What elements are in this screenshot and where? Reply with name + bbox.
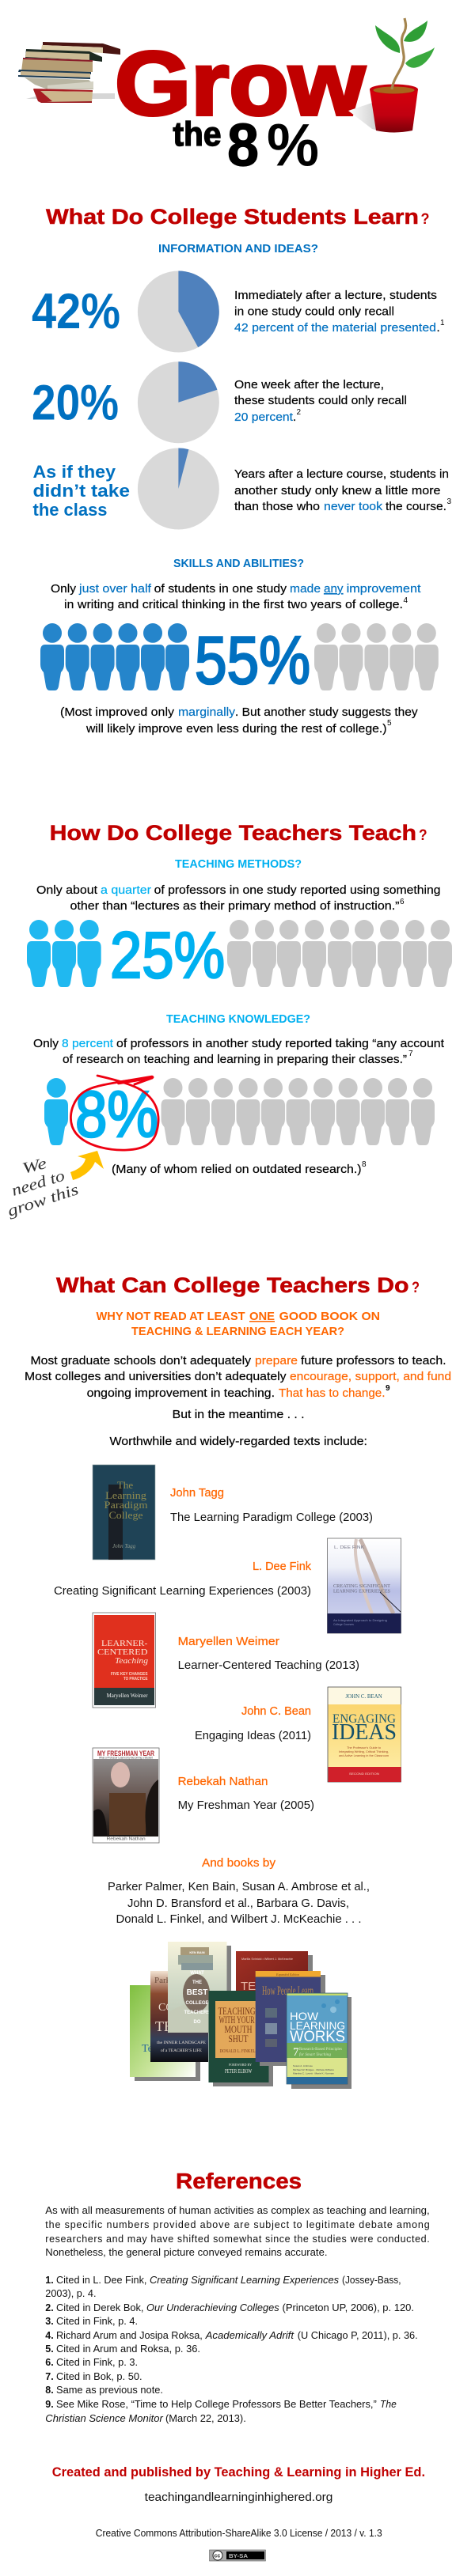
book: How Learning Works: 7 xyxy=(293,2046,299,2059)
text: most graduate schools: prepare xyxy=(255,1354,298,1367)
text: one week after the lecture: 2 xyxy=(296,408,301,417)
book: Palmer: the INNER LANDSCAPE xyxy=(157,2041,206,2045)
book cover: Learner-Centered Teaching: CENTERED xyxy=(97,1647,148,1657)
list: numbered references: 7. xyxy=(45,2371,54,2382)
text: just over half: of students in one study xyxy=(154,582,287,596)
text: references introduction: the specific numbers provided above are subject to legitimate debate among xyxy=(45,2219,430,2230)
arrow: orange pointing to 8% xyxy=(70,1151,104,1180)
book entry: Rebekah Nathan: My Freshman Year (2005) xyxy=(178,1799,314,1812)
book: How Learning Works: Susan A. Ambrose xyxy=(293,2064,313,2067)
book: What the Best College Teachers Do: COLLEGE xyxy=(185,2001,209,2006)
heading: How Do College Teachers Teach: ? xyxy=(419,827,428,844)
text: and books by xyxy=(108,1856,370,1926)
list: numbered references: (U Chicago P, 2011), p. 36. xyxy=(298,2330,418,2341)
book cover: Learner-Centered Teaching xyxy=(93,1613,155,1708)
title: Grow: Grow xyxy=(115,34,365,134)
stat: 55%: 55% xyxy=(195,623,310,698)
book cover: Creating Significant Learning Experiences xyxy=(328,1538,401,1633)
list: numbered references xyxy=(45,2275,418,2424)
book: How Learning Works: Michael W. Bridges · Michele DiPietro xyxy=(293,2068,334,2071)
book: Teaching Tips red xyxy=(236,1951,313,2003)
credit: created and published by: Created and published by Teaching & Learning in Higher Ed. xyxy=(52,2464,425,2480)
book: Palmer: TH xyxy=(155,2018,174,2034)
text: references introduction: researchers and may have shifted somewhat since the studies were conducted. xyxy=(45,2234,430,2245)
book: What the Best College Teachers Do: WHAT xyxy=(190,1971,204,1976)
book cover: Engaging Ideas xyxy=(328,1687,401,1782)
book: What the Best College Teachers Do: TEACHERS xyxy=(184,2010,211,2015)
text: most graduate schools: Most colleges and universities don’t adequately xyxy=(25,1370,287,1383)
book: Teaching Tips red: Marilla Svinicki • Wilbert J. McKeachie xyxy=(241,1957,294,1961)
list: numbered references: Richard Arum and Josipa Roksa, xyxy=(56,2330,203,2341)
book entry: L. Dee Fink xyxy=(54,1560,311,1598)
text: 8 percent of professors: of research on teaching and learning in preparing their classes.” xyxy=(63,1053,407,1066)
book entry: Maryellen Weimer: Learner-Centered Teaching (2013) xyxy=(178,1659,359,1672)
text: but in the meantime: But in the meantime . . . xyxy=(173,1408,305,1421)
book cover: Learner-Centered Teaching: LEARNER- xyxy=(101,1639,148,1648)
book: Palmer: of a TEACHER’S LIFE xyxy=(161,2049,202,2053)
list: numbered references: 1. xyxy=(45,2275,54,2286)
title: the 8%: 8 xyxy=(227,112,259,179)
book entry: Rebekah Nathan xyxy=(178,1775,314,1812)
heading: References: References xyxy=(176,2169,302,2193)
pie chart: a few percent xyxy=(138,448,219,530)
book cover: Engaging Ideas: Integrating Writing, Critical Thinking, xyxy=(339,1750,389,1753)
book: Teaching with Your Mouth Shut xyxy=(209,1991,273,2086)
text: one week after the lecture xyxy=(234,378,407,424)
book entry: L. Dee Fink: L. Dee Fink xyxy=(253,1560,311,1573)
annotation: we need to grow this: need to xyxy=(10,1167,66,1200)
book cover: Learner-Centered Teaching: Maryellen Weimer xyxy=(107,1693,148,1699)
text: most graduate schools: Most graduate schools don’t adequately xyxy=(30,1354,252,1367)
list: numbered references: Creating Significant Learning Experiences xyxy=(150,2275,339,2286)
book cover: My Freshman Year xyxy=(93,1748,159,1843)
icon: stack of books xyxy=(18,42,120,103)
icon: blue person 8 percent xyxy=(44,1078,68,1145)
book entry: John C. Bean: John C. Bean xyxy=(241,1704,311,1718)
heading: What Can College Teachers Do: ? xyxy=(412,1280,420,1296)
text: one week after the lecture: . xyxy=(293,410,296,424)
text: 8 percent of professors: of professors in another study reported taking “any account xyxy=(116,1037,445,1050)
book: What the Best College Teachers Do: KEN BAIN xyxy=(189,1950,205,1954)
list: numbered references: Cited in Arum and Roksa, p. 36. xyxy=(56,2343,200,2355)
book: green cover: Te xyxy=(142,2043,153,2055)
list: numbered references: Our Underachieving Colleges xyxy=(146,2302,279,2313)
book entry: John Tagg xyxy=(170,1486,373,1524)
stat: as if they didn't take the class xyxy=(33,462,130,520)
text: and books by: Parker Palmer, Ken Bain, Susan A. Ambrose et al., xyxy=(108,1880,370,1893)
book: Teaching with Your Mouth Shut: WITH YOUR xyxy=(218,2014,255,2026)
book cover: Learner-Centered Teaching: FIVE KEY CHANGES xyxy=(111,1672,148,1677)
book cover: The Learning Paradigm College: John Tagg xyxy=(112,1543,136,1549)
list: numbered references: Cited in Bok, p. 50. xyxy=(56,2371,142,2382)
icon: creative commons badge: BY-SA xyxy=(229,2554,248,2559)
book entry: John C. Bean: Engaging Ideas (2011) xyxy=(195,1729,311,1742)
text: just over half: made xyxy=(290,582,321,596)
book: green cover xyxy=(130,1985,200,2081)
book: Teaching with Your Mouth Shut: MOUTH xyxy=(225,2023,252,2035)
text: years after a lecture course: another study only knew a little more xyxy=(234,484,440,497)
book: What the Best College Teachers Do: BEST xyxy=(187,1988,207,1997)
list: numbered references: Academically Adrift xyxy=(205,2330,294,2341)
list: numbered references: (March 22, 2013). xyxy=(165,2413,246,2424)
book: How People Learn xyxy=(256,1971,325,2066)
text: a quarter of professors: 6 xyxy=(400,898,405,906)
title: the 8%: the xyxy=(173,115,222,153)
icon row: blue people 25 percent xyxy=(27,920,101,987)
list: numbered references: 2003), p. 4. xyxy=(45,2288,96,2299)
book cover: My Freshman Year: Rebekah Nathan xyxy=(107,1836,146,1841)
text: years after a lecture course: Years after a lecture course, students in xyxy=(234,467,449,481)
text: immediately after a lecture: in one study could only recall xyxy=(234,305,394,318)
text: most graduate schools: That has to change. xyxy=(279,1386,385,1400)
annotation: we need to grow this xyxy=(6,1155,81,1220)
stat: as if they didn't take the class: As if they xyxy=(33,462,116,482)
subheading: teaching knowledge: TEACHING KNOWLEDGE? xyxy=(166,1012,310,1026)
book entry: L. Dee Fink: Creating Significant Learning Experiences (2003) xyxy=(54,1584,311,1598)
book cover: The Learning Paradigm College xyxy=(93,1465,155,1560)
text: years after a lecture course: never took xyxy=(324,500,383,513)
book entry: John Tagg: The Learning Paradigm College (2003) xyxy=(170,1511,373,1524)
book: Palmer: CO xyxy=(158,2002,173,2014)
book: Palmer xyxy=(150,1971,208,2062)
book: What the Best College Teachers Do xyxy=(168,1942,231,2033)
book: Teaching Tips red: TEA xyxy=(241,1980,264,1993)
book cover: Engaging Ideas: The Professor’s Guide to xyxy=(347,1746,381,1749)
subheading: teaching methods: TEACHING METHODS? xyxy=(175,857,302,871)
text: a quarter of professors: other than “lectures as their primary method of instruction.” xyxy=(70,899,399,913)
book cover: Creating Significant Learning Experiences: College Courses xyxy=(333,1623,354,1626)
subheading: why not read at least one good book: ONE xyxy=(249,1310,275,1323)
text: immediately after a lecture: 1 xyxy=(440,319,445,327)
text: most improved only marginally: 5 xyxy=(387,719,392,728)
text: most improved only marginally: will likely improve even less during the rest of college.) xyxy=(86,722,386,736)
icon row: grey people 75 percent xyxy=(227,920,452,987)
text: 8 percent of professors xyxy=(33,1037,445,1066)
stat: as if they didn't take the class: the class xyxy=(33,500,108,520)
annotation: we need to grow this: We xyxy=(21,1155,48,1178)
text: just over half: improvement xyxy=(347,582,421,596)
book cover: Engaging Ideas: and Active Learning in the Classroom xyxy=(339,1754,389,1757)
list: numbered references: Cited in Fink, p. 3. xyxy=(56,2357,138,2368)
book: Teaching with Your Mouth Shut: FOREWORD BY xyxy=(229,2063,252,2067)
text: and books by: And books by xyxy=(202,1856,276,1870)
book: Teaching with Your Mouth Shut: SHUT xyxy=(228,2033,249,2045)
book entry: John Tagg: John Tagg xyxy=(170,1486,224,1500)
text: most improved only marginally: marginally xyxy=(178,705,236,719)
book: How Learning Works: Research-Based Principles xyxy=(299,2048,342,2052)
icon: potted plant xyxy=(348,18,435,133)
text: just over half: Only xyxy=(51,582,77,596)
list: numbered references: See Mike Rose, “Time to Help College Professors Be Better Teachers,” xyxy=(56,2399,377,2410)
annotation: we need to grow this: grow this xyxy=(6,1181,81,1220)
list: numbered references: Cited in L. Dee Fink, xyxy=(56,2275,146,2286)
pie chart: 42 percent xyxy=(138,270,219,353)
pie chart: 20 percent xyxy=(138,361,219,443)
text: most improved only marginally: (Most improved only xyxy=(60,705,175,719)
text: immediately after a lecture xyxy=(234,289,445,335)
list: numbered references: (Jossey-Bass, xyxy=(342,2275,401,2286)
book entry: Maryellen Weimer xyxy=(178,1635,359,1672)
icon: creative commons badge xyxy=(210,2550,265,2561)
list: numbered references: 4. xyxy=(45,2330,54,2341)
subheading: why not read at least one good book: WHY NOT READ AT LEAST xyxy=(97,1310,245,1323)
book cover: Creating Significant Learning Experiences: An Integrated Approach to Designing xyxy=(333,1619,387,1622)
list: numbered references: The xyxy=(380,2399,397,2410)
text: just over half: any xyxy=(324,582,344,596)
list: numbered references: 2. xyxy=(45,2302,54,2313)
book cover: Learner-Centered Teaching: TO PRACTICE xyxy=(124,1677,148,1681)
stat: 25%: 25% xyxy=(110,918,225,992)
annotation: red circle and strike xyxy=(70,1076,158,1150)
text: years after a lecture course xyxy=(234,467,451,513)
text: most improved only marginally: . But another study suggests they xyxy=(235,705,418,719)
book entry: John C. Bean xyxy=(195,1704,311,1742)
book cover: Creating Significant Learning Experiences: CREATING SIGNIFICANT xyxy=(333,1583,390,1589)
stat: as if they didn't take the class: didn’t take xyxy=(33,481,130,501)
subheading: why not read at least one good book: TEACHING & LEARNING EACH YEAR? xyxy=(131,1325,344,1338)
book cover: Engaging Ideas: JOHN C. BEAN xyxy=(345,1693,382,1700)
list: numbered references: 3. xyxy=(45,2316,54,2327)
text: years after a lecture course: the course. xyxy=(386,500,446,513)
book cover: Engaging Ideas: SECOND EDITION xyxy=(349,1772,380,1776)
text: many of whom: 8 xyxy=(362,1160,367,1169)
book cover: The Learning Paradigm College: Learning xyxy=(105,1489,147,1501)
book cover: Engaging Ideas: ENGAGING xyxy=(332,1712,396,1726)
icon row: blue people 55 percent xyxy=(40,623,189,690)
text: most graduate schools: encourage, support, and fund xyxy=(290,1370,451,1383)
text: a quarter of professors: a quarter xyxy=(101,883,151,897)
text: website: teachingandlearninginhighered.org xyxy=(145,2491,332,2504)
text: most improved only marginally xyxy=(60,705,418,736)
list: numbered references: 6. xyxy=(45,2357,54,2368)
book cover: Engaging Ideas: IDEAS xyxy=(332,1719,397,1745)
book: How People Learn: Expanded Edition xyxy=(276,1973,299,1976)
text: worthwhile texts: Worthwhile and widely-regarded texts include: xyxy=(109,1435,367,1448)
text: just over half: in writing and critical thinking in the first two years of college. xyxy=(64,598,403,611)
book entry: Maryellen Weimer: Maryellen Weimer xyxy=(178,1635,279,1648)
text: 8 percent of professors: 7 xyxy=(408,1050,413,1058)
book: How Learning Works xyxy=(287,1993,352,2089)
text: 8 percent of professors: 8 percent xyxy=(62,1037,114,1050)
text: references introduction xyxy=(45,2205,430,2258)
book: How Learning Works: HOW xyxy=(290,2010,319,2022)
book: Teaching with Your Mouth Shut: DONALD L. FINKEL xyxy=(220,2048,256,2054)
text: a quarter of professors xyxy=(36,883,440,913)
text: one week after the lecture: One week after the lecture, xyxy=(234,378,384,392)
list: numbered references: Cited in Fink, p. 4. xyxy=(56,2316,138,2327)
text: one week after the lecture: 20 percent xyxy=(234,410,294,424)
title: the 8% xyxy=(173,112,319,179)
book cover: The Learning Paradigm College: The xyxy=(117,1479,133,1491)
book cover: My Freshman Year: MY FRESHMAN YEAR xyxy=(97,1749,154,1757)
text: immediately after a lecture: . xyxy=(437,321,440,335)
list: numbered references: (Princeton UP, 2006), p. 120. xyxy=(282,2302,414,2313)
stat: 20%: 20% xyxy=(32,375,119,430)
book cover: Creating Significant Learning Experiences: L. DEE FINK xyxy=(334,1545,365,1550)
heading: What Do College Students Learn: ? xyxy=(421,211,429,228)
book: What the Best College Teachers Do: THE xyxy=(192,1980,202,1985)
text: a quarter of professors: of professors in one study reported using something xyxy=(154,883,440,897)
subheading: why not read at least one good book xyxy=(97,1310,380,1338)
book: How People Learn: How People Learn xyxy=(262,1984,314,1998)
list: numbered references: 9. xyxy=(45,2399,54,2410)
book collage xyxy=(130,1942,352,2089)
text: 8 percent of professors: Only xyxy=(33,1037,59,1050)
text: one week after the lecture: these students could only recall xyxy=(234,394,407,407)
book: Teaching with Your Mouth Shut: PETER ELBOW xyxy=(225,2068,252,2075)
icon row: grey people 92 percent xyxy=(162,1078,435,1145)
text: and books by: Donald L. Finkel, and Wilbert J. McKeachie . . . xyxy=(116,1912,361,1926)
book entry: Rebekah Nathan: Rebekah Nathan xyxy=(178,1775,268,1788)
book cover: The Learning Paradigm College: Paradigm xyxy=(104,1499,147,1511)
book: How Learning Works: WORKS xyxy=(290,2029,345,2045)
list: numbered references: Cited in Derek Bok, xyxy=(56,2302,144,2313)
book: Teaching with Your Mouth Shut: TEACHING xyxy=(218,2005,255,2017)
text: many of whom: (Many of whom relied on outdated research.) xyxy=(112,1163,362,1176)
text: years after a lecture course: 3 xyxy=(446,497,451,506)
book: What the Best College Teachers Do: DO xyxy=(193,2020,201,2025)
subheading: information and ideas: INFORMATION AND IDEAS? xyxy=(158,242,318,255)
text: references introduction: As with all measurements of human activities as complex as teaching and learning, xyxy=(45,2205,430,2216)
text: immediately after a lecture: Immediately after a lecture, students xyxy=(234,289,437,302)
book: How Learning Works: Marsha C. Lovett · Marie K. Norman xyxy=(293,2072,334,2075)
heading: What Can College Teachers Do: What Can College Teachers Do xyxy=(56,1273,408,1297)
book: How Learning Works: LEARNING xyxy=(290,2019,345,2032)
stat: 8%: 8% xyxy=(75,1077,158,1151)
list: numbered references: 5. xyxy=(45,2343,54,2355)
text: and books by: John D. Bransford et al., Barbara G. Davis, xyxy=(127,1897,349,1910)
book: Palmer: Park xyxy=(154,1976,171,1985)
stat: 42%: 42% xyxy=(32,284,120,339)
list: numbered references: Same as previous note. xyxy=(56,2385,163,2396)
text: most graduate schools: 9 xyxy=(386,1384,390,1393)
text: most graduate schools: ongoing improvement in teaching. xyxy=(87,1386,275,1400)
heading: How Do College Teachers Teach: How Do College Teachers Teach xyxy=(50,821,416,845)
text: years after a lecture course: than those who xyxy=(234,500,320,513)
book cover: My Freshman Year: What a Professor Learned by Becoming a Student xyxy=(99,1756,153,1759)
list: numbered references: 8. xyxy=(45,2385,54,2396)
heading: What Do College Students Learn: What Do College Students Learn xyxy=(46,205,419,229)
book cover: Learner-Centered Teaching: Teaching xyxy=(115,1656,149,1666)
subheading: skills and abilities: SKILLS AND ABILITIES? xyxy=(173,557,304,570)
icon row: grey people 45 percent xyxy=(314,623,439,690)
text: license: Creative Commons Attribution-ShareAlike 3.0 License / 2013 / v. 1.3 xyxy=(96,2528,382,2539)
subheading: why not read at least one good book: GOOD BOOK ON xyxy=(279,1310,380,1323)
book cover: Creating Significant Learning Experiences: LEARNING EXPERIENCES xyxy=(333,1588,390,1594)
text: a quarter of professors: Only about xyxy=(36,883,98,897)
book: How Learning Works: for Smart Teaching xyxy=(299,2053,332,2057)
text: most graduate schools: future professors to teach. xyxy=(301,1354,446,1367)
book cover: The Learning Paradigm College: College xyxy=(109,1509,143,1521)
title: the 8%: % xyxy=(267,112,319,179)
icon: creative commons badge: cc xyxy=(214,2553,220,2559)
text: references introduction: Nonetheless, the general picture conveyed remains accurate. xyxy=(45,2247,328,2258)
text: immediately after a lecture: 42 percent of the material presented xyxy=(234,321,436,335)
text: just over half xyxy=(51,582,421,611)
text: just over half: just over half xyxy=(78,582,152,596)
list: numbered references: Christian Science Monitor xyxy=(45,2413,164,2424)
text: most graduate schools xyxy=(25,1354,451,1400)
text: just over half: 4 xyxy=(404,596,408,605)
